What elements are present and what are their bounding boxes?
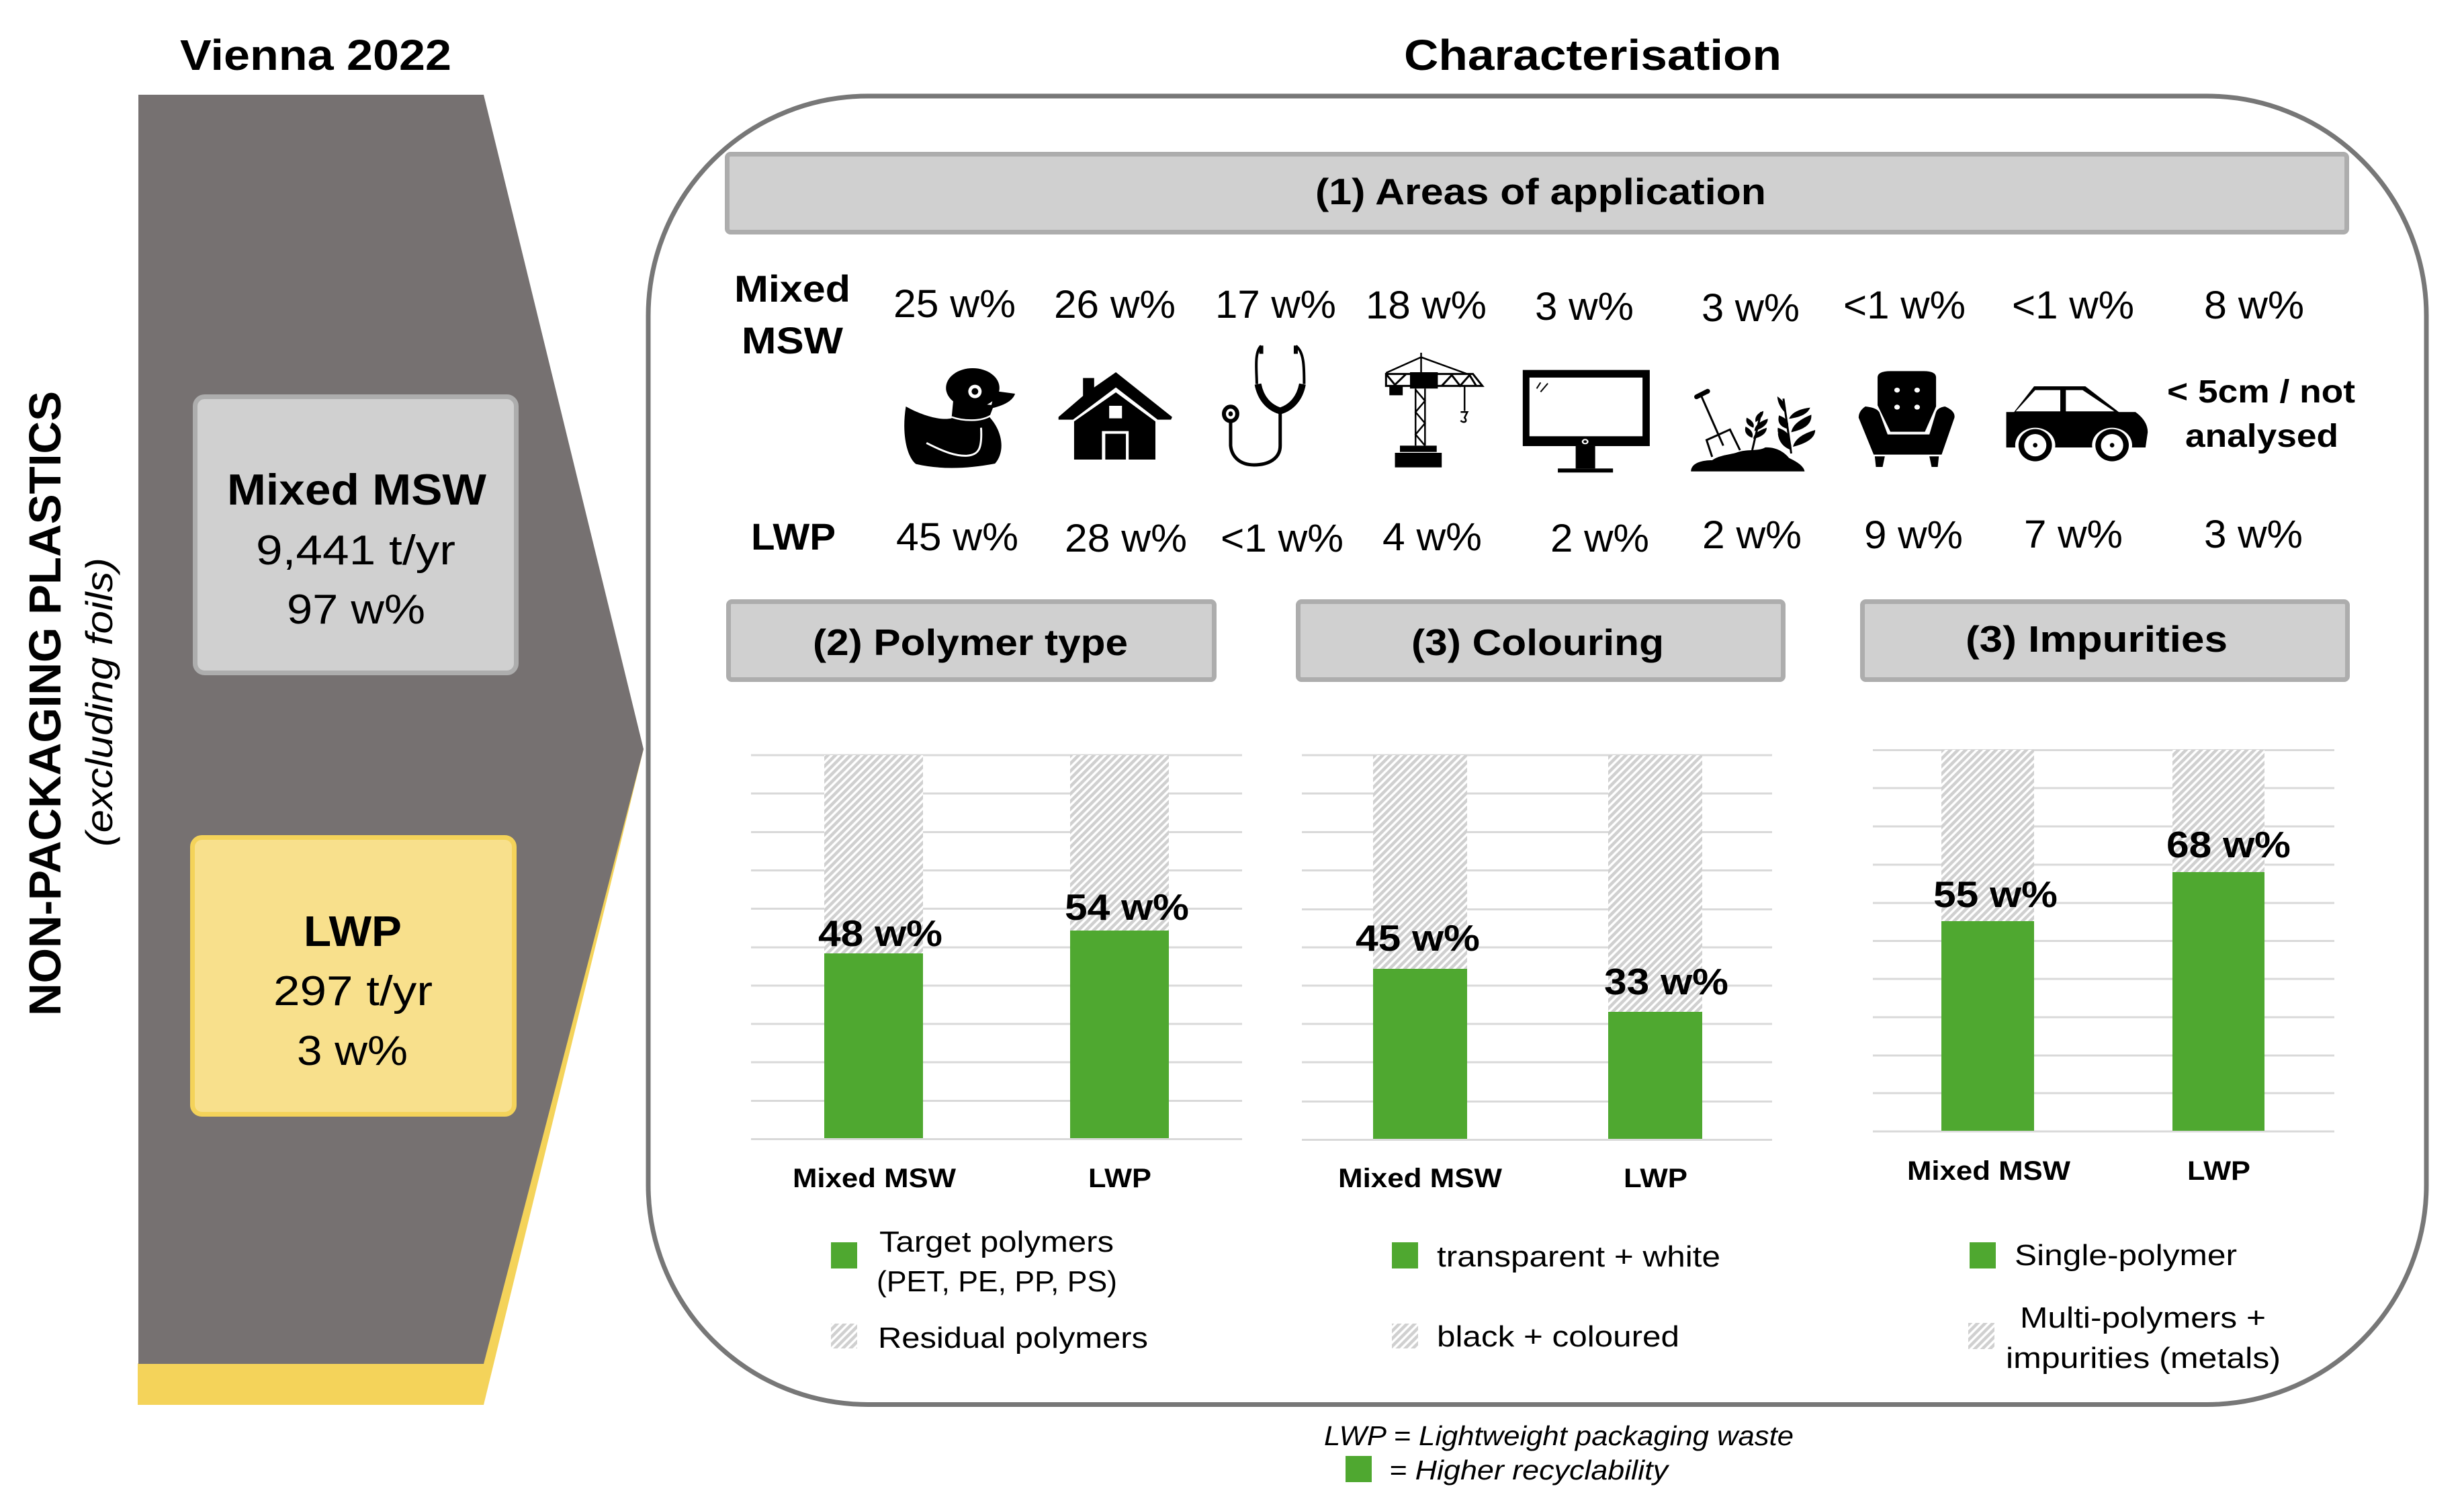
values: LWP row: 4 w% [1382, 515, 1482, 559]
heading: Characterisation: Characterisation [1404, 31, 1781, 79]
values: Mixed MSW row: 25 w% [893, 282, 1016, 326]
header: impurities [1862, 602, 2347, 680]
legend: colouring: transparent + white [1437, 1240, 1720, 1273]
values: Mixed MSW row: 3 w% [1702, 286, 1800, 330]
header: polymer type: (2) Polymer type [813, 621, 1128, 663]
axis label: Mixed MSW: Mixed MSW [1338, 1164, 1502, 1193]
axis label: LWP: LWP [2187, 1156, 2250, 1186]
section: areas of application [727, 155, 2355, 560]
values: Mixed MSW row: 3 w% [1535, 285, 1634, 329]
header: areas of application: (1) Areas of application [1315, 171, 1766, 212]
icon: car (automotive) [2007, 386, 2148, 463]
bar: Mixed MSW multi-polymers [1941, 750, 2034, 921]
bar: LWP residual [1070, 755, 1169, 931]
vertical label: non-packaging plastics [20, 391, 120, 1016]
arrow: waste stream flow [138, 95, 644, 1405]
axis label: LWP: LWP [1088, 1164, 1151, 1193]
icon: stethoscope (medical) [1224, 345, 1304, 465]
legend: colouring: black + coloured [1437, 1320, 1679, 1353]
bar: Mixed MSW target 48 w% [824, 953, 923, 1138]
chart: colouring stacked bars [1302, 755, 1772, 1193]
row labels: Mixed [734, 267, 850, 310]
legend: impurities: impurities (metals) [2006, 1342, 2281, 1375]
values: Mixed MSW row: <1 w% [2012, 284, 2134, 327]
values: LWP row: 7 w% [2024, 513, 2123, 556]
legend: polymer type: Target polymers [879, 1225, 1114, 1258]
value label: 68 w%: 68 w% [2166, 824, 2291, 865]
bar: Mixed MSW residual [824, 755, 923, 953]
value label: 48 w%: 48 w% [818, 912, 942, 954]
axis label: Mixed MSW: Mixed MSW [1907, 1156, 2070, 1186]
label: under 5cm not analysed [2167, 374, 2355, 454]
legend: polymer type [831, 1225, 1148, 1354]
values: Mixed MSW row: 26 w% [1054, 283, 1176, 327]
bar: Mixed MSW black + coloured [1373, 755, 1467, 969]
values: LWP row: <1 w% [1221, 517, 1344, 560]
values: LWP row: 9 w% [1864, 513, 1963, 557]
header: impurities: (3) Impurities [1966, 618, 2228, 660]
values: LWP row [896, 513, 2303, 560]
row labels: MSW [742, 319, 843, 361]
values: LWP row: 2 w% [1550, 517, 1649, 560]
legend: impurities [1968, 1239, 2281, 1375]
legend: impurities: Multi-polymers + [2020, 1301, 2266, 1334]
footnote: abbreviations and green key: LWP = Lightweight packaging waste [1324, 1420, 1794, 1451]
card: LWP stream: 297 t/yr [273, 968, 433, 1015]
axis label: LWP: LWP [1624, 1164, 1687, 1193]
values: LWP row: 28 w% [1065, 517, 1187, 560]
value label: 55 w%: 55 w% [1933, 873, 2058, 915]
section: impurities [1862, 602, 2347, 1375]
icon: monitor (electronics) [1523, 370, 1650, 472]
card: LWP stream: LWP [304, 907, 402, 955]
legend: polymer type: Residual polymers [878, 1322, 1148, 1354]
footnote: abbreviations and green key [1324, 1420, 1794, 1486]
bar: LWP target 54 w% [1070, 931, 1169, 1138]
values: LWP row: 2 w% [1702, 513, 1802, 557]
chart: impurities stacked bars [1873, 750, 2334, 1186]
value label: 54 w%: 54 w% [1065, 886, 1189, 928]
icon: tower crane (construction) [1386, 353, 1483, 468]
value label: 45 w%: 45 w% [1356, 917, 1480, 959]
values: LWP row: 45 w% [896, 515, 1018, 559]
vertical label: non-packaging plastics: (excluding foils) [78, 558, 120, 847]
vertical label: non-packaging plastics: NON-PACKAGING PLASTICS [20, 391, 71, 1016]
bar: LWP multi-polymers [2172, 750, 2264, 872]
values: LWP row: 3 w% [2204, 513, 2303, 556]
bar: LWP single-polymer 68 w% [2172, 872, 2264, 1131]
bar: LWP transparent + white 33 w% [1608, 1012, 1702, 1139]
legend: polymer type: (PET, PE, PP, PS) [877, 1265, 1117, 1298]
icon: rubber duck (toys) [904, 368, 1015, 468]
heading: Vienna 2022: Vienna 2022 [180, 31, 451, 79]
chart: polymer type stacked bars [751, 755, 1242, 1193]
legend: colouring [1392, 1240, 1720, 1353]
values: Mixed MSW row: 17 w% [1215, 283, 1336, 327]
values: Mixed MSW row: <1 w% [1843, 284, 1966, 327]
header: polymer type [728, 602, 1215, 680]
card: Mixed MSW stream: 97 w% [287, 587, 425, 633]
values: Mixed MSW row: 18 w% [1366, 284, 1487, 327]
icon: armchair (furniture) [1859, 371, 1955, 467]
bar: LWP black + coloured [1608, 755, 1702, 1012]
header: areas of application [727, 155, 2347, 232]
card: Mixed MSW stream: Mixed MSW [227, 465, 487, 514]
section: polymer type [728, 602, 1242, 1354]
row labels [734, 267, 850, 558]
panel: characterisation [648, 96, 2426, 1404]
values: Mixed MSW row [893, 282, 2304, 330]
label: under 5cm not analysed: < 5cm / not [2167, 374, 2355, 410]
card: LWP stream: 3 w% [297, 1028, 408, 1074]
footnote: abbreviations and green key: = Higher recyclability [1389, 1455, 1670, 1486]
card: Mixed MSW stream: 9,441 t/yr [256, 527, 455, 574]
card: Mixed MSW stream [195, 396, 516, 673]
axis label: Mixed MSW: Mixed MSW [793, 1164, 956, 1193]
values: Mixed MSW row: 8 w% [2204, 284, 2304, 327]
icon: garden shovel and plants (agriculture) [1691, 391, 1815, 472]
row labels: LWP [751, 515, 836, 558]
header: colouring [1298, 602, 1783, 680]
icon: house (building) [1059, 372, 1172, 460]
card: LWP stream [192, 837, 515, 1114]
bar: Mixed MSW single-polymer 55 w% [1941, 921, 2034, 1131]
section: colouring [1298, 602, 1783, 1353]
header: colouring: (3) Colouring [1411, 621, 1664, 663]
value label: 33 w%: 33 w% [1604, 961, 1728, 1002]
bar: Mixed MSW transparent + white 45 w% [1373, 969, 1467, 1139]
label: under 5cm not analysed: analysed [2185, 419, 2338, 454]
legend: impurities: Single-polymer [2015, 1239, 2237, 1272]
